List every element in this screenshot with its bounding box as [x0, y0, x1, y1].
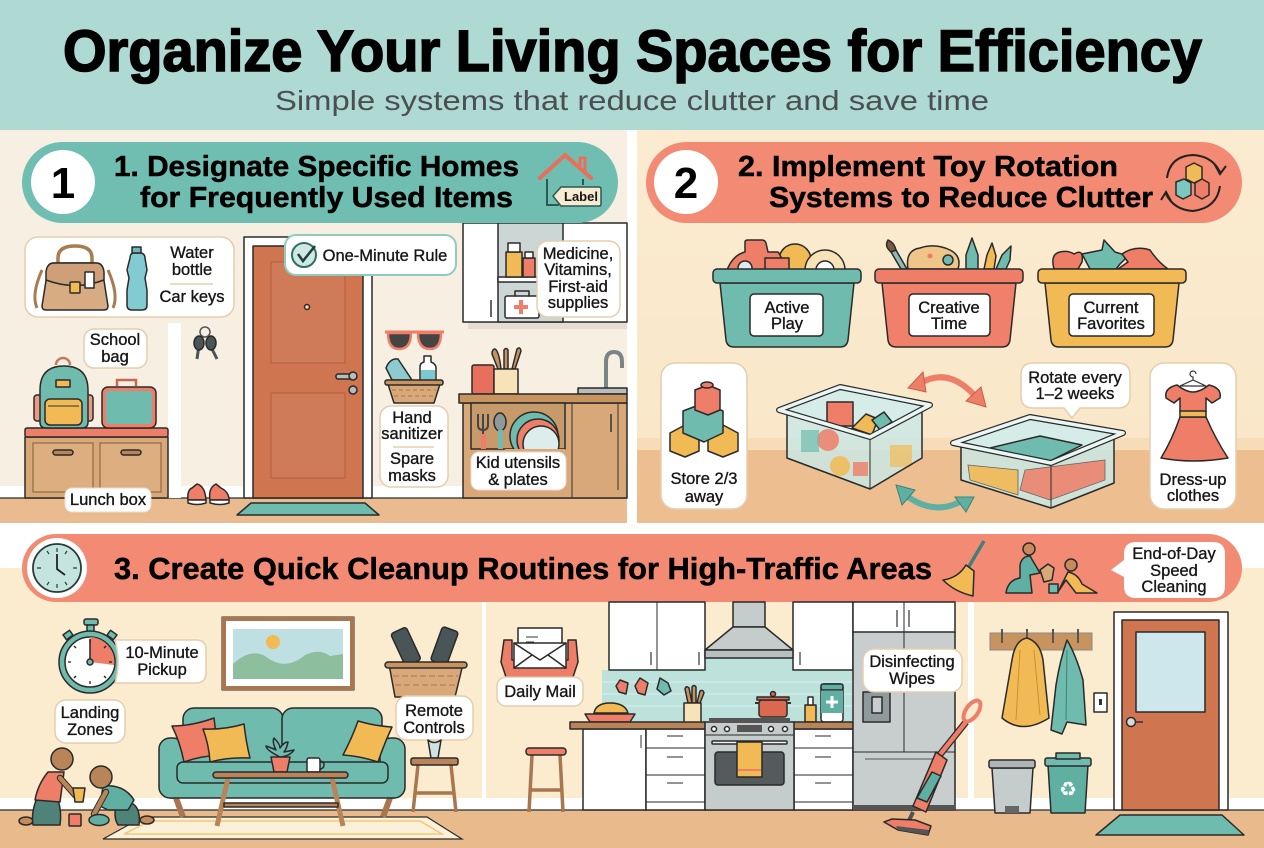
bin: active play: [713, 240, 861, 347]
heading 1: [114, 151, 519, 214]
one-minute rule callout: One-Minute Rule: [323, 247, 447, 265]
upper cabinets: [609, 602, 955, 670]
icon: clock: [27, 538, 87, 598]
daily mail tray: [501, 628, 578, 677]
lower cabinets: [570, 722, 853, 810]
icon: yellow coat: [1002, 638, 1049, 726]
basket of remotes: [385, 626, 467, 697]
one-minute rule callout: [285, 235, 456, 275]
icon: broom: [943, 541, 984, 596]
kitchen counter: [459, 348, 627, 498]
kid utensils label: & plates: [488, 471, 548, 489]
bin: current favorites: Current: [1083, 299, 1139, 317]
recycling bin: [1045, 753, 1091, 813]
icon: plates: [505, 412, 565, 465]
header pill 1: [22, 142, 618, 223]
store away card: Store 2/3: [671, 470, 737, 488]
bottle: [805, 697, 816, 722]
number badge 2: [654, 150, 718, 214]
subtitle: Simple systems that reduce clutter and save time: [275, 85, 989, 116]
lunch box label: Lunch box: [70, 491, 147, 509]
bench: [25, 428, 168, 498]
medicine label: [537, 241, 620, 317]
header pill 3: [22, 534, 1242, 602]
doormat: [237, 503, 379, 515]
bin: creative time: [875, 238, 1023, 347]
back door: [1114, 612, 1228, 810]
icon: sunglasses: [385, 332, 444, 349]
icon: blocks: [670, 382, 738, 457]
hand sanitizer label: Spare: [390, 450, 434, 468]
kitchen: [497, 602, 962, 812]
remote controls label: Remote: [405, 702, 463, 720]
bag and bottle card: Water: [170, 244, 214, 262]
picture frame: [222, 617, 354, 690]
lunch box label: [65, 488, 151, 512]
coffee table: [213, 772, 348, 826]
header pill 2: [646, 142, 1242, 223]
kids picking up: [19, 748, 154, 826]
utensil crock: [684, 686, 704, 723]
dress-up card: [1150, 363, 1236, 509]
dress-up card: clothes: [1167, 487, 1219, 505]
icon: fork and spoon: [478, 413, 506, 449]
icon: keys: [194, 327, 217, 359]
medicine label: Vitamins,: [544, 261, 612, 279]
fridge: [853, 632, 955, 810]
kid utensils label: Kid utensils: [476, 454, 560, 472]
store away card: [661, 363, 747, 509]
icon: teal coat: [1051, 640, 1086, 734]
bag and bottle card: Car keys: [159, 288, 225, 306]
hand sanitizer label: [380, 406, 448, 487]
bin: current favorites: Favorites: [1077, 315, 1145, 333]
panel: toy rotation: [637, 130, 1264, 523]
bag and bottle card: bottle: [172, 261, 212, 279]
vacuum: [884, 698, 984, 835]
icon: shoes: [188, 484, 229, 504]
pillows: [172, 718, 392, 762]
title: Organize Your Living Spaces for Efficiency: [63, 19, 1202, 84]
dress-up card: Dress-up: [1160, 471, 1226, 489]
icon: backpack: [34, 358, 93, 428]
icon: handbag: [35, 246, 115, 310]
arrow: teal swap: [896, 485, 974, 512]
10-minute label: Pickup: [137, 661, 187, 679]
heading 2: Systems to Reduce Clutter: [769, 182, 1153, 214]
bar stool: [526, 748, 566, 812]
heading 3: 3. Create Quick Cleanup Routines for High-Traffic Areas: [114, 551, 932, 586]
disinfecting wipes label: Disinfecting: [869, 653, 955, 671]
medicine label: First-aid: [548, 278, 608, 296]
end-of-day callout: Cleaning: [1141, 578, 1207, 596]
door: [244, 237, 372, 498]
stove: [705, 718, 794, 810]
rotate callout: 1–2 weeks: [1036, 385, 1114, 403]
back doormat: [1096, 815, 1244, 835]
bin: creative time: Time: [931, 315, 967, 333]
icon: kids tidying: [1006, 543, 1097, 593]
school bag label: [84, 329, 147, 368]
10-minute label: 10-Minute: [125, 644, 199, 662]
sofa: [159, 708, 405, 817]
recycling bin: ♻: [1059, 779, 1077, 801]
header band: [0, 0, 1264, 130]
kid utensils label: [471, 452, 566, 490]
range hood: [705, 602, 793, 658]
grey bin: [989, 760, 1035, 813]
bin: current favorites: [1038, 240, 1186, 347]
10-minute label: [115, 640, 206, 683]
heading 2: 2. Implement Toy Rotation: [738, 151, 1118, 183]
heading 1: 1. Designate Specific Homes: [114, 151, 519, 183]
bin: active play: Play: [771, 315, 804, 333]
remote controls label: [396, 696, 473, 740]
icon: dress: [1161, 371, 1228, 461]
hand sanitizer label: sanitizer: [381, 425, 443, 443]
panel: quick cleanup: [0, 534, 1264, 848]
icon: lunch box: [102, 380, 156, 428]
landing zones label: Landing: [61, 704, 119, 722]
end-of-day callout: Speed: [1150, 562, 1198, 580]
clear bin with toys: [779, 387, 930, 489]
school bag label: bag: [101, 348, 129, 366]
bin: creative time: Creative: [918, 299, 980, 317]
disinfecting wipes label: [863, 649, 962, 692]
wall strip: [168, 323, 181, 498]
school bag label: School: [90, 331, 140, 349]
coat hooks: [990, 629, 1092, 650]
heading 2: [738, 151, 1153, 214]
number badge 2: 2: [674, 159, 698, 208]
medicine label: supplies: [548, 294, 608, 312]
plant and mug: [266, 738, 324, 772]
icon: basket of masks and sanitizer: [385, 356, 443, 403]
medicine cabinet: [463, 223, 627, 329]
pot: [755, 692, 791, 717]
medicine label: Medicine,: [543, 245, 613, 263]
daily mail label: Daily Mail: [504, 683, 576, 701]
rotate callout: [1021, 363, 1130, 418]
store away card: away: [685, 488, 724, 506]
side stool: [411, 740, 458, 812]
bin: active play: Active: [765, 299, 809, 317]
clear bin flat: [953, 417, 1123, 508]
wipes canister: [821, 684, 843, 722]
remote controls label: Controls: [403, 719, 465, 737]
icon: stopwatch: [59, 619, 121, 693]
icon: house label: Label: [564, 189, 598, 204]
icon: house label: [540, 155, 601, 206]
icon: rotating cubes: [1161, 155, 1226, 211]
bag and bottle card: [25, 237, 234, 317]
landing zones label: [55, 700, 125, 743]
landing zones label: Zones: [67, 721, 113, 739]
heading 1: for Frequently Used Items: [140, 182, 513, 214]
icon: water bottle: [127, 247, 147, 310]
light switch: [1094, 693, 1107, 712]
panel: designate homes: [0, 130, 627, 523]
hand sanitizer label: masks: [388, 467, 436, 485]
number badge 1: [31, 150, 95, 214]
end-of-day callout: [1111, 542, 1225, 598]
number badge 1: 1: [51, 159, 75, 208]
daily mail label: [497, 677, 583, 706]
hand sanitizer label: Hand: [392, 409, 432, 427]
fruit bowl: [585, 703, 635, 722]
end-of-day callout: End-of-Day: [1132, 545, 1216, 563]
disinfecting wipes label: Wipes: [889, 670, 935, 688]
icon: mugs: [616, 678, 671, 695]
rotate callout: Rotate every: [1028, 369, 1123, 387]
entryway: [989, 612, 1244, 835]
rug: [103, 817, 462, 839]
arrow: coral swap: [908, 372, 986, 407]
